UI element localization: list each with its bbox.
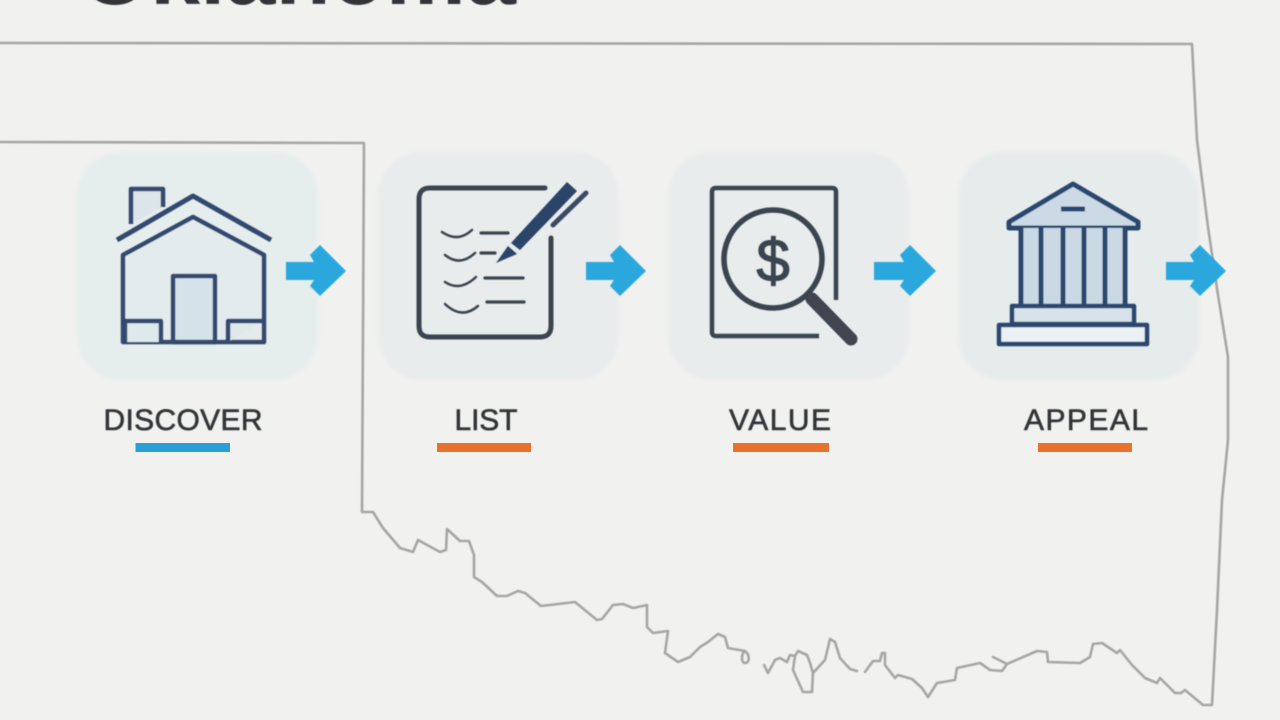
arrow: discover to list (286, 245, 346, 296)
label: list: LIST (454, 404, 518, 437)
label: value: VALUE (729, 404, 831, 437)
tile: value (668, 152, 909, 380)
arrow: list to value (586, 245, 646, 296)
tile: list (378, 152, 619, 380)
step 4: appeal (958, 152, 1226, 452)
underline: appeal (1038, 443, 1132, 452)
label: appeal: APPEAL (1024, 404, 1148, 437)
underline: list (437, 443, 531, 452)
underline: value (733, 443, 829, 452)
tile: appeal (958, 152, 1199, 380)
arrow: value to appeal (874, 245, 936, 296)
icon: house (117, 189, 271, 342)
step 1: discover (77, 152, 346, 452)
tile: discover (77, 152, 318, 380)
icon: document with magnifier: $ (756, 227, 790, 294)
underline: discover (136, 443, 230, 452)
label: discover: DISCOVER (104, 404, 262, 437)
icon: courthouse (999, 184, 1147, 344)
icon: checklist with pen (419, 182, 586, 337)
arrow: after appeal (1166, 245, 1226, 296)
icon: document with magnifier (712, 188, 851, 339)
step 2: list (378, 152, 646, 452)
step 3: value (668, 152, 936, 452)
